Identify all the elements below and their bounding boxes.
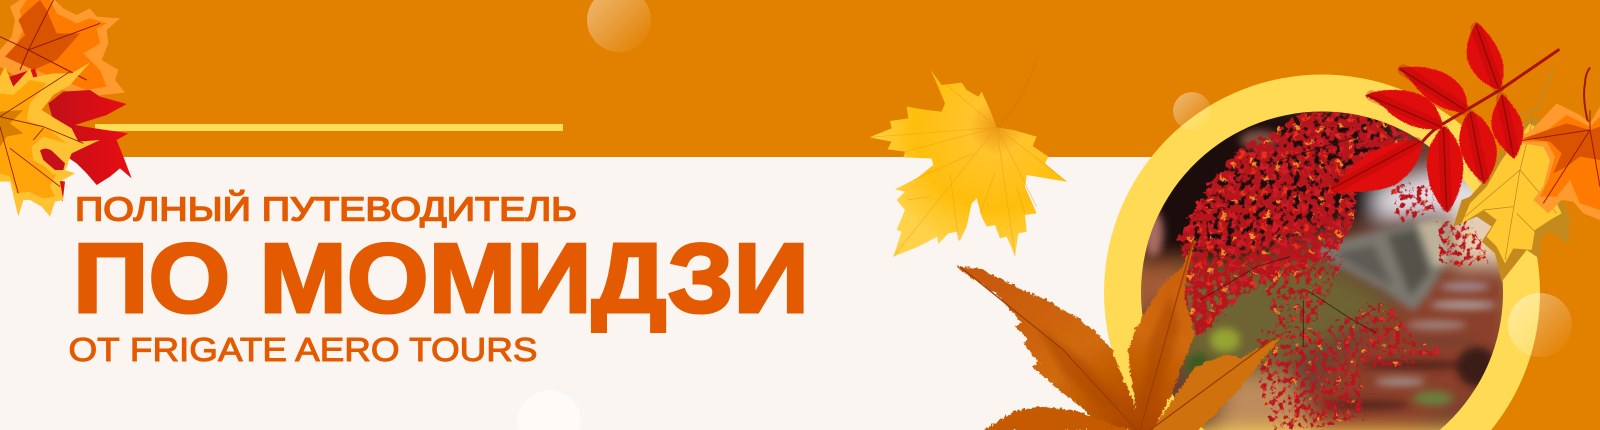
yellow maple leaf, centre <box>869 58 1067 257</box>
yellow maple leaf, top left <box>0 63 100 217</box>
yellow ring <box>1104 75 1540 430</box>
red leaflets <box>1330 23 1522 211</box>
brown maple leaf, bottom <box>955 237 1280 430</box>
subheading: ОТ FRIGATE AERO TOURS <box>68 332 538 369</box>
yellow maple leaf, right <box>1453 68 1570 282</box>
branches <box>1200 137 1377 347</box>
orange maple leaf, top left <box>0 0 125 97</box>
red maple foliage <box>1177 112 1423 337</box>
decorative yellow line <box>95 124 563 131</box>
sparse lower maple sprays <box>1257 183 1490 428</box>
red compound leaf <box>1330 23 1558 211</box>
translucent circles <box>517 0 1572 430</box>
red blob with yellow rim <box>37 145 68 175</box>
blurred background scenery <box>1130 100 1513 430</box>
orange maple leaf, right <box>1500 68 1600 220</box>
heading line 1: ПОЛНЫЙ ПУТЕВОДИТЕЛЬ <box>75 190 577 228</box>
circular photo: autumn maple over stone path <box>1130 100 1513 430</box>
main heading: ПО МОМИДЗИ <box>73 223 809 333</box>
red maple leaf, top left <box>5 68 132 202</box>
title block <box>68 190 809 369</box>
